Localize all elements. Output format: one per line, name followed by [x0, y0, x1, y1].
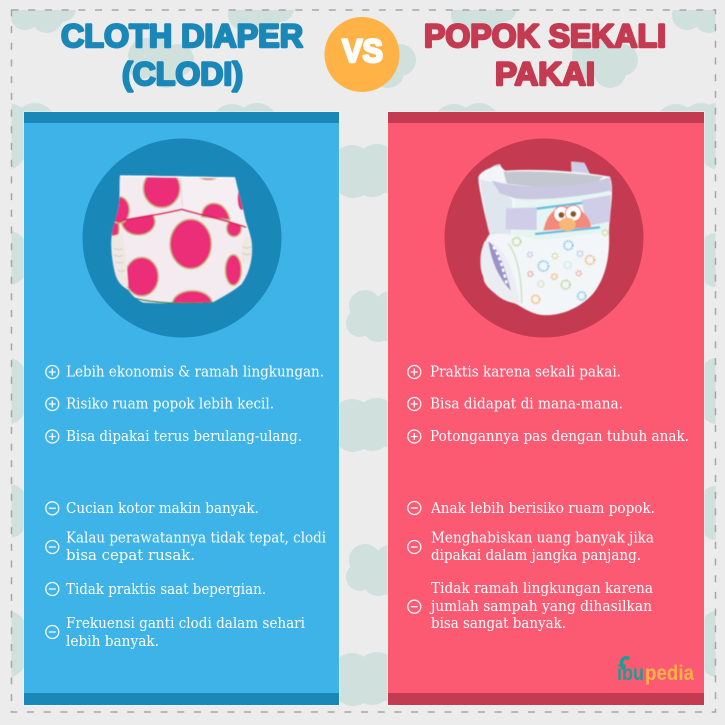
plus icons [46, 366, 59, 443]
leg ruffle [481, 242, 520, 303]
left side panel [480, 179, 512, 235]
advantages list: Praktis karena sekali pakai. [430, 364, 621, 380]
advantages list: Potongannya pas dengan tubuh anak. [430, 429, 689, 445]
disadvantages list: Menghabiskan uang banyak jika [431, 530, 654, 546]
waistband [492, 177, 612, 200]
front panel [513, 191, 610, 240]
disadvantages list: Frekuensi ganti clodi dalam sehari [66, 616, 305, 632]
inner waist [503, 171, 603, 187]
left flap [118, 176, 181, 220]
advantages list: Bisa didapat di mana-mana. [430, 396, 623, 412]
title: cloth diaper: CLOTH DIAPER [61, 18, 303, 54]
disadvantages list: Cucian kotor makin banyak. [66, 501, 259, 517]
logo: ibupedia: ibu [617, 662, 644, 685]
disadvantages list: Anak lebih berisiko ruam popok. [430, 501, 655, 517]
disadvantages list [66, 501, 326, 650]
vs badge: VS [342, 33, 383, 69]
pros and cons: cloth diaper [46, 364, 326, 650]
disadvantages list: jumlah sampah yang dihasilkan [429, 599, 652, 615]
ruffles [110, 233, 128, 287]
disadvantages list: Tidak praktis saat bepergian. [66, 582, 266, 598]
title: popok sekali pakai: PAKAI [495, 56, 595, 92]
tape tabs [506, 195, 611, 230]
title: popok sekali pakai [424, 18, 666, 92]
printed dots [513, 230, 608, 303]
icon circle: disposable diaper [444, 138, 644, 338]
advantages list [66, 364, 324, 445]
body [478, 166, 612, 315]
minus icons [408, 502, 421, 613]
icon circle: cloth diaper [82, 138, 282, 338]
elmo [543, 207, 591, 231]
title: cloth diaper [61, 18, 303, 92]
panel: cloth diaper [23, 111, 340, 706]
panel: popok sekali pakai [387, 111, 705, 706]
disadvantages list: Tidak ramah lingkungan karena [431, 581, 653, 597]
title: cloth diaper: (CLODI) [122, 56, 243, 92]
right flap [226, 177, 244, 226]
disadvantages list: lebih banyak. [66, 634, 159, 650]
advantages list [430, 364, 689, 445]
title: popok sekali pakai: POPOK SEKALI [424, 18, 666, 54]
disadvantages list: bisa cepat rusak. [66, 548, 195, 564]
back tabs [488, 161, 591, 179]
disadvantages list: dipakai dalam jangka panjang. [431, 548, 641, 564]
advantages list: Lebih ekonomis & ramah lingkungan. [66, 364, 324, 380]
minus icons [46, 502, 59, 638]
plus icons [408, 366, 421, 443]
logo: ibupedia [617, 658, 694, 685]
logo: ibupedia: pedia [645, 662, 694, 685]
illustration: cloth diaper [110, 174, 253, 304]
disadvantages list: Kalau perawatannya tidak tepat, clodi [66, 530, 326, 546]
vs badge [324, 17, 400, 92]
advantages list: Bisa dipakai terus berulang-ulang. [66, 429, 302, 445]
illustration: disposable diaper [478, 161, 612, 315]
disadvantages list [429, 501, 655, 632]
disadvantages list: bisa sangat banyak. [431, 616, 566, 632]
advantages list: Risiko ruam popok lebih kecil. [66, 396, 274, 412]
pros and cons: disposable diaper [408, 364, 689, 632]
